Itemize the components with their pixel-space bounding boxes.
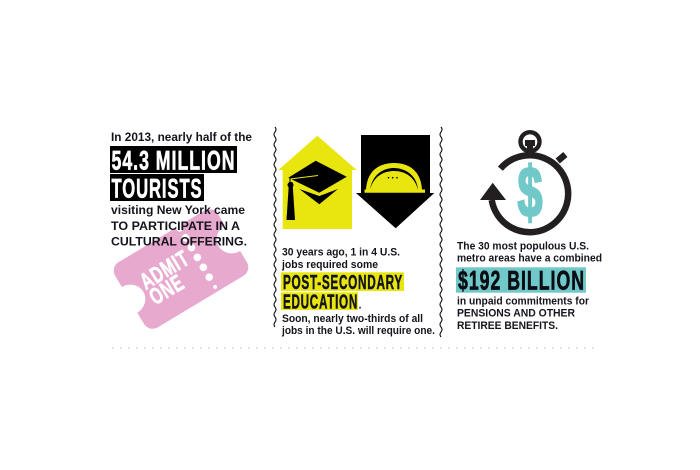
text: pensions intro — [457, 241, 602, 265]
icon: stopwatch with dollar sign — [480, 132, 568, 232]
panel: tourists — [109, 131, 253, 332]
highlight: 192 billion: $192 BILLION — [458, 266, 585, 296]
highlight: 54.3 million — [110, 146, 237, 176]
highlight: post-secondary: POST-SECONDARY — [283, 272, 403, 294]
text: education outro: Soon, nearly two-thirds of all — [282, 313, 423, 325]
text: pensions body: RETIREE BENEFITS. — [457, 320, 558, 332]
highlight: education: EDUCATION — [283, 292, 358, 314]
highlight: 54.3 million: 54.3 MILLION — [112, 146, 236, 176]
text: education outro — [281, 313, 435, 337]
text: intro line: In 2013, nearly half of the — [111, 131, 253, 144]
highlight: education — [281, 292, 362, 314]
text: pensions intro: The 30 most populous U.S. — [457, 241, 589, 253]
text: pensions body — [457, 295, 590, 332]
text: education outro: jobs in the U.S. will require one. — [281, 325, 435, 337]
icon: admit one ticket: ADMIT — [135, 245, 194, 294]
icon: stopwatch with dollar sign: $ — [518, 154, 542, 232]
text: pensions body: PENSIONS AND OTHER — [457, 308, 575, 320]
highlight: post-secondary — [281, 272, 404, 294]
panel: education — [278, 135, 435, 337]
text: pensions body: in unpaid commitments for — [457, 295, 590, 307]
text: tourists body: visiting New York came — [111, 204, 246, 217]
text: tourists body: CULTURAL OFFERING. — [111, 236, 247, 248]
highlight: education: . — [358, 300, 362, 312]
icon: hard hat in down arrow — [356, 135, 434, 228]
icon: admit one ticket — [109, 204, 252, 332]
icon: admit one ticket: ONE — [144, 269, 189, 310]
text: pensions intro: metro areas have a combined — [457, 253, 602, 265]
highlight: tourists — [110, 174, 204, 204]
text: tourists body: TO PARTICIPATE IN A — [111, 220, 241, 233]
text: education intro: jobs required some — [281, 259, 378, 271]
highlight: tourists: TOURISTS — [112, 174, 202, 204]
highlight: 192 billion — [456, 266, 586, 296]
text: education intro: 30 years ago, 1 in 4 U.S. — [282, 246, 400, 258]
icon: graduation cap in up arrow — [278, 136, 357, 229]
text: tourists body — [111, 204, 247, 248]
panel: pensions — [456, 132, 602, 332]
text: education intro — [281, 246, 400, 271]
